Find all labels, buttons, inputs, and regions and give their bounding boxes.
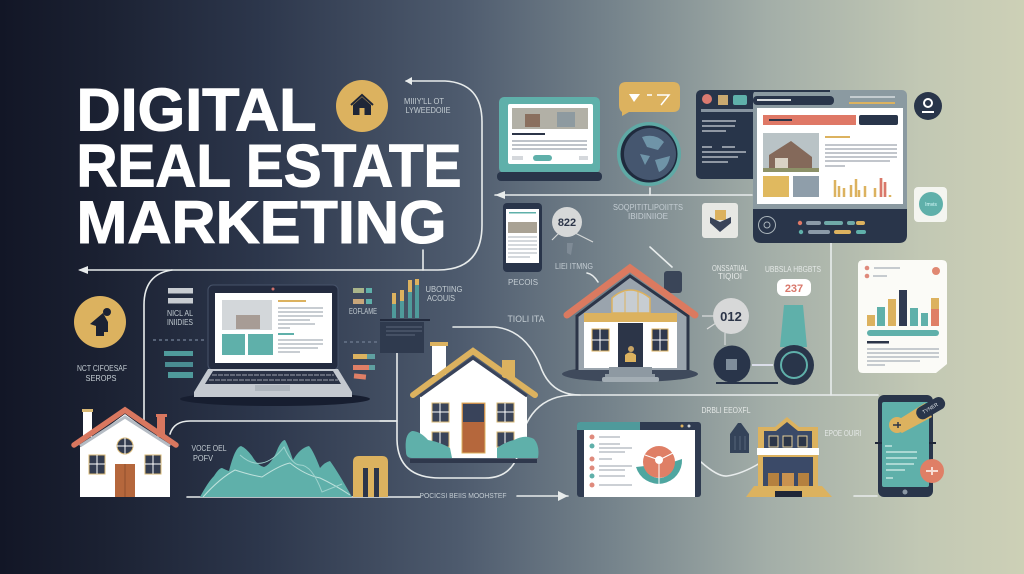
labels: top house (508, 262, 748, 324)
small bar chart panel (380, 279, 430, 353)
badge: 237 (765, 265, 821, 296)
labels: top house: TIQIOI (718, 272, 742, 281)
icon: teal circle card (914, 187, 947, 222)
title: REAL ESTATE (76, 132, 462, 200)
stat bubble: 822: 822 (558, 217, 576, 229)
globe (617, 122, 681, 186)
label: bottom line caption: POCICSI BEIIS MOOHSTEF (420, 493, 506, 500)
label: chart caption: ACOUIS (427, 294, 455, 303)
laptop right legend (344, 288, 378, 380)
badge: 237: 237 (785, 283, 803, 295)
label: area chart caption: POFV (193, 454, 214, 463)
icon: teal circle card: Imvis (925, 202, 937, 208)
main browser window (753, 90, 907, 243)
icon: profile badge (914, 92, 942, 120)
icon: download card (702, 203, 738, 238)
title (76, 76, 462, 256)
label: building captions: DRBLI EEOXFL (702, 406, 751, 415)
label: person caption: SEROPS (86, 374, 116, 383)
label: centre caption (613, 203, 683, 221)
chart card (858, 260, 947, 373)
label: centre caption: IBIDINIIOE (628, 212, 668, 221)
phone: bottom right (875, 395, 947, 497)
label: top badge caption (404, 97, 450, 115)
title: MARKETING (76, 189, 446, 256)
icon: gold home badge (336, 80, 388, 132)
icon: gold person badge (74, 296, 126, 348)
label: centre caption: SOQPITITLIPOIITTS (613, 203, 683, 212)
connector lines (78, 77, 878, 501)
laptop: centre left (180, 285, 370, 406)
label: building captions: EPOE OUIRI (824, 429, 862, 438)
laptop right legend: EOFLAME (349, 307, 377, 316)
labels: top house: LIEI ITMNG (555, 262, 593, 271)
label: area chart caption (192, 444, 227, 463)
area chart (200, 440, 352, 497)
laptop left legend (153, 288, 204, 378)
teal laptop card (497, 97, 602, 181)
title: DIGITAL (76, 76, 316, 144)
stat bubble: 012 (702, 298, 749, 345)
labels: top house: ONSSATIIAL (712, 264, 748, 273)
smart device (714, 305, 814, 385)
stat bubble: 012: 012 (720, 309, 742, 324)
house: top centre (562, 268, 698, 382)
stat bubble: 822 (552, 207, 593, 255)
dark sidebar panel (696, 90, 758, 179)
laptop left legend: INIIDIES (167, 318, 193, 327)
speech bubble (619, 82, 680, 116)
label: chart caption: UBOTIING (426, 285, 462, 294)
label: top badge caption: LYWEEDOIIE (406, 106, 450, 115)
icon: gold pillars block (353, 456, 388, 497)
label: top badge caption: MIIIY'LL OT (404, 97, 444, 106)
house: centre (406, 342, 538, 463)
label: person caption (77, 364, 127, 383)
badge: 237: UBBSLA HBGBTS (765, 265, 821, 274)
house: bottom left (74, 409, 176, 497)
labels: top house: TIOLI ITA (508, 314, 544, 324)
label: person caption: NCT CIFOESAF (77, 364, 127, 373)
phone: listing (503, 203, 542, 272)
laptop left legend: NICL AL (167, 309, 193, 318)
label: building captions (702, 406, 862, 438)
phone: bottom right: TYNER (922, 402, 940, 416)
icon: small dark building (730, 423, 749, 453)
label: chart caption (426, 285, 462, 303)
donut chart window (577, 422, 701, 497)
label: phone caption: PECOIS (508, 278, 538, 287)
label: area chart caption: VOCE OEL (192, 444, 227, 453)
building: storefront (746, 417, 832, 497)
